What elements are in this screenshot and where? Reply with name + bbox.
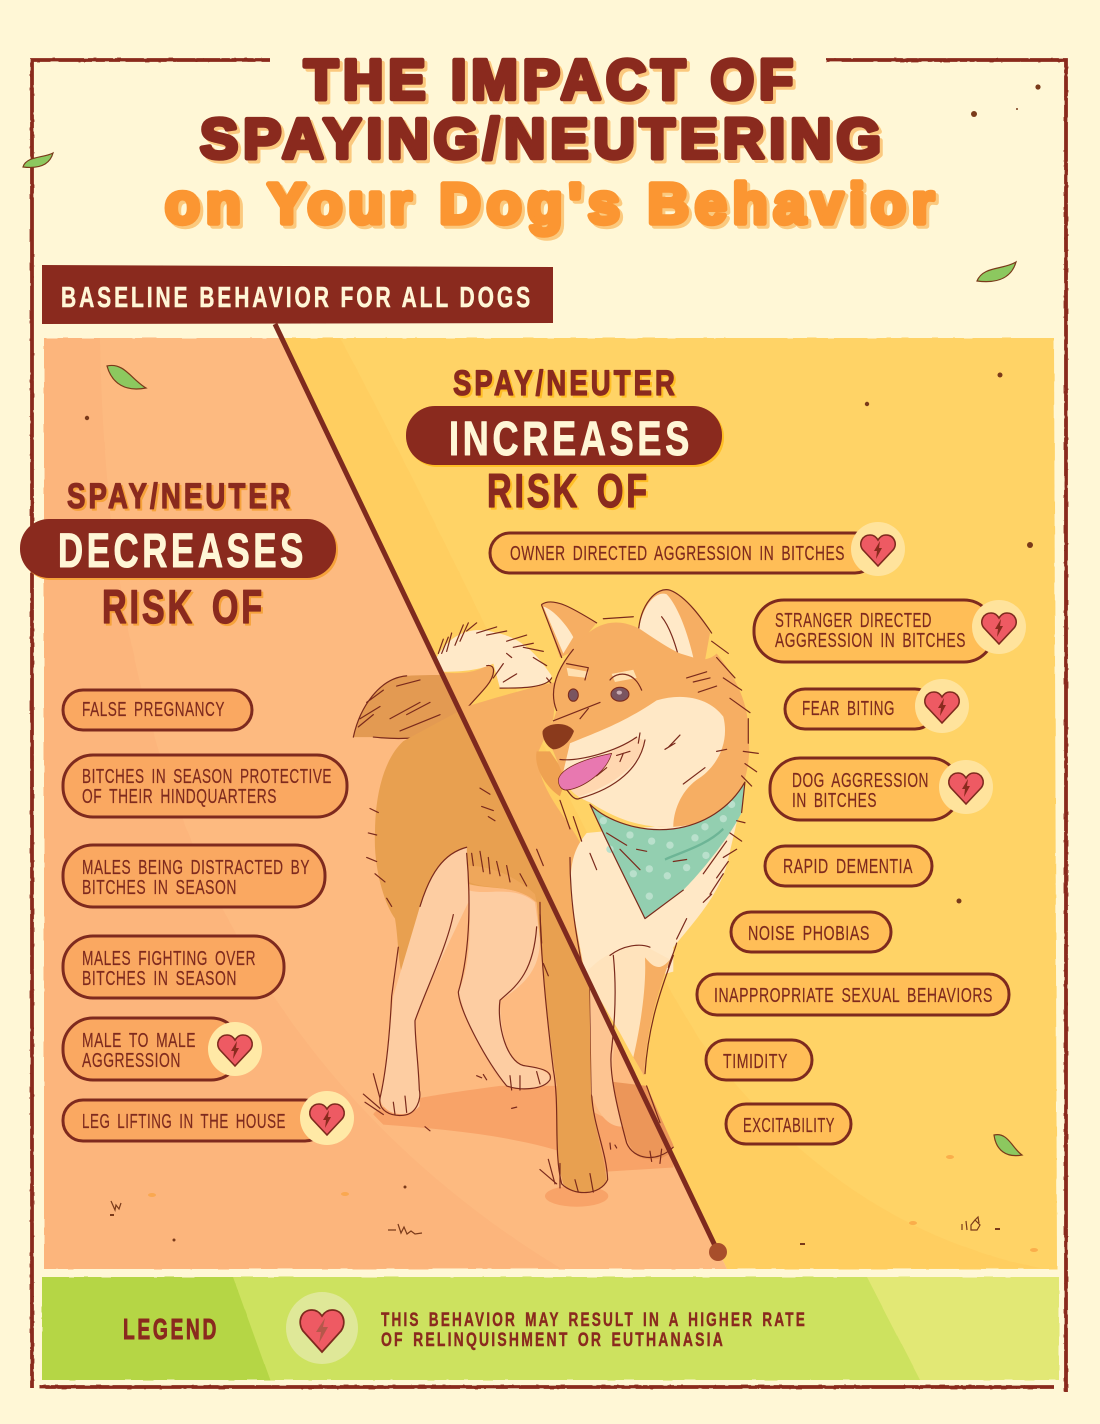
ears <box>542 590 712 670</box>
pill: noise phobias: NOISE PHOBIAS <box>748 923 870 945</box>
pill: excitability <box>726 1104 851 1144</box>
icon: broken heart <box>939 760 993 814</box>
pill: male to male aggression: AGGRESSION <box>82 1050 181 1072</box>
ground shadow <box>373 1086 673 1207</box>
banner: baseline behavior: BASELINE BEHAVIOR FOR ALL DOGS <box>61 282 533 314</box>
pill: rapid dementia: RAPID DEMENTIA <box>783 856 913 878</box>
pill: owner directed aggression: OWNER DIRECTED AGGRESSION IN BITCHES <box>510 543 845 565</box>
heading: decreases risk: RISK OF <box>102 580 265 633</box>
pill: fear biting: FEAR BITING <box>802 698 895 720</box>
pill: stranger directed aggression: AGGRESSION IN BITCHES <box>775 630 966 652</box>
heading: increases risk: INCREASES <box>449 413 693 466</box>
leaves <box>23 153 1022 1156</box>
pill: male to male aggression: MALE TO MALE <box>82 1030 196 1052</box>
pill: fear biting <box>785 679 969 733</box>
legend background bands <box>42 1277 1059 1380</box>
bandana <box>590 782 745 919</box>
icon: broken heart <box>972 600 1026 654</box>
pill: timidity <box>706 1040 812 1080</box>
panel: legend <box>42 1277 1059 1380</box>
pill: stranger directed aggression <box>754 600 1026 662</box>
pill: rapid dementia <box>765 846 932 886</box>
pill: inappropriate sexual behaviors <box>697 974 1009 1015</box>
pill: timidity: TIMIDITY <box>723 1051 788 1073</box>
eyes and brows <box>553 617 642 721</box>
pill: bitches in season protective <box>63 755 347 817</box>
pill: false pregnancy: FALSE PREGNANCY <box>82 699 225 721</box>
title: THE IMPACT OF <box>304 48 798 112</box>
banner: baseline behavior <box>42 265 553 324</box>
pill: noise phobias <box>731 912 891 952</box>
pill: bitches in season protective: BITCHES IN SEASON PROTECTIVE <box>82 766 332 788</box>
title: on Your Dog's Behavior <box>165 172 940 236</box>
pill: dog aggression: DOG AGGRESSION <box>792 770 929 792</box>
body, front (right of line) <box>463 682 583 963</box>
icon: broken heart <box>300 1091 354 1145</box>
icon: broken heart <box>851 522 905 576</box>
pill: males fighting <box>63 936 284 998</box>
diagonal baseline divider with end dot <box>275 324 727 1261</box>
rear leg outlines <box>380 847 550 1115</box>
pill: owner directed aggression <box>490 522 905 576</box>
tail <box>353 623 553 738</box>
pill: inappropriate sexual behaviors: INAPPROPRIATE SEXUAL BEHAVIORS <box>714 985 993 1007</box>
chest <box>570 822 737 974</box>
icon: legend broken heart <box>286 1292 358 1364</box>
heading: increases risk: RISK OF <box>487 464 650 517</box>
pill: bitches in season protective: OF THEIR HINDQUARTERS <box>82 786 277 808</box>
pill: leg lifting <box>63 1091 354 1145</box>
icon: broken heart <box>208 1022 262 1076</box>
pill: males being distracted: BITCHES IN SEASON <box>82 877 237 899</box>
small specks and grass <box>85 84 1041 1245</box>
panel: left orange background <box>44 338 727 1269</box>
heading: increases risk <box>406 364 722 517</box>
icon: broken heart <box>915 679 969 733</box>
pill: males being distracted: MALES BEING DISTRACTED BY <box>82 857 310 879</box>
pill: leg lifting: LEG LIFTING IN THE HOUSE <box>82 1111 286 1133</box>
pill: dog aggression: IN BITCHES <box>792 790 877 812</box>
heading: decreases risk: SPAY/NEUTER <box>67 477 293 516</box>
rear legs <box>380 847 550 1114</box>
heading: decreases risk <box>20 477 336 633</box>
pill: stranger directed aggression: STRANGER DIRECTED <box>775 610 932 632</box>
pill: males fighting: BITCHES IN SEASON <box>82 968 237 990</box>
head <box>543 622 749 827</box>
body, rear (left of line) <box>375 711 607 1193</box>
heading: decreases risk: DECREASES <box>58 525 307 578</box>
pill: excitability: EXCITABILITY <box>743 1115 835 1137</box>
title <box>165 48 940 236</box>
panel: legend: THIS BEHAVIOR MAY RESULT IN A HIGHER RATE <box>381 1310 807 1331</box>
fur strokes <box>665 641 758 939</box>
far front leg <box>585 945 673 1163</box>
pill: false pregnancy <box>63 690 252 730</box>
mouth and tongue <box>558 733 645 799</box>
pill: males being distracted <box>63 845 325 907</box>
panel: right yellow background <box>283 338 1057 1269</box>
pill: males fighting: MALES FIGHTING OVER <box>82 948 256 970</box>
nose <box>543 724 574 749</box>
pill: male to male aggression <box>63 1018 262 1080</box>
pill: dog aggression <box>770 758 993 820</box>
muzzle and cheek cream <box>563 697 725 827</box>
panel: legend: LEGEND <box>123 1314 219 1346</box>
panel: legend: OF RELINQUISHMENT OR EUTHANASIA <box>381 1330 725 1351</box>
near front leg outline <box>540 902 608 1193</box>
heading: increases risk: SPAY/NEUTER <box>453 364 678 403</box>
title: SPAYING/NEUTERING <box>200 107 886 171</box>
illustration: shiba inu dog with bandana <box>353 590 758 1207</box>
